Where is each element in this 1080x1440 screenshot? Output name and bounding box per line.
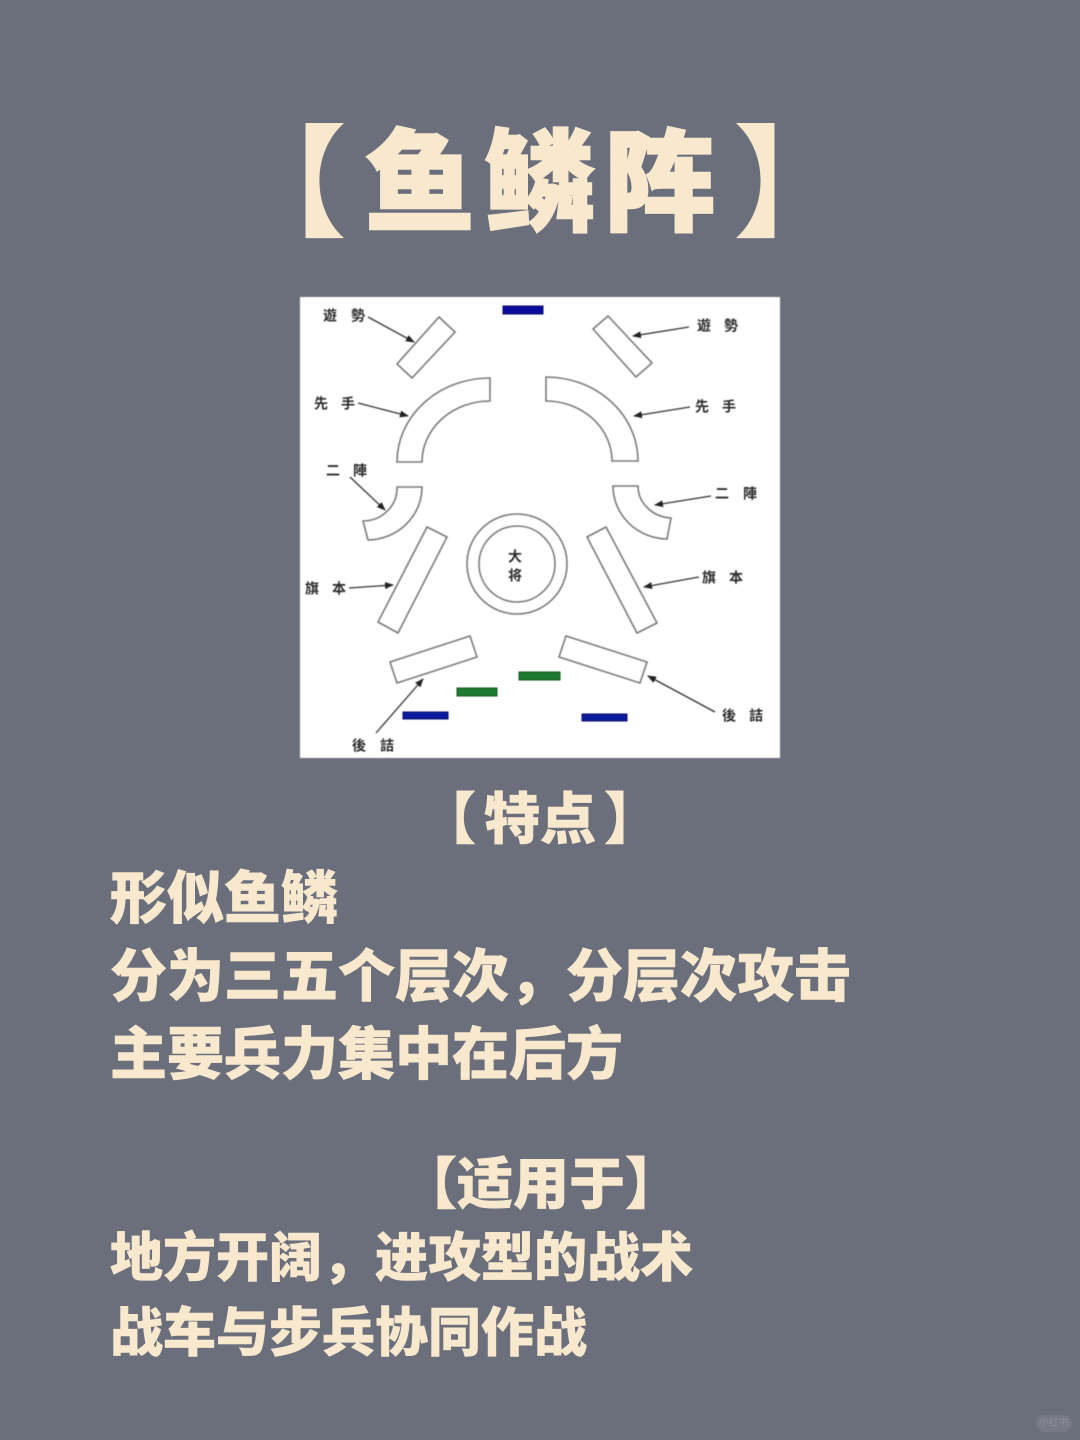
title: 阵 xyxy=(605,123,715,246)
watermark: 小红书 xyxy=(1039,1418,1069,1429)
diagram labels: 陣 xyxy=(353,464,367,480)
diagram labels: 旗 xyxy=(305,580,319,598)
diagram labels: 二 xyxy=(715,488,729,502)
diagram labels: 勢 xyxy=(351,308,365,324)
diagram labels xyxy=(305,308,763,754)
diagram labels: 本 xyxy=(332,580,346,598)
title: 鳞 xyxy=(485,123,595,246)
formation units xyxy=(363,316,671,683)
diagram labels: 先 xyxy=(695,398,709,416)
diagram: fish scale formation xyxy=(299,296,781,759)
diagram labels: 手 xyxy=(341,396,355,412)
features text xyxy=(110,867,851,1087)
title: 鱼 xyxy=(365,123,475,246)
heading: applicable to: 【适用于】 xyxy=(401,1153,681,1216)
diagram labels: 本 xyxy=(729,570,743,586)
applicable text: 战车与步兵协同作战 xyxy=(110,1304,587,1363)
diagram labels: 詰 xyxy=(380,738,394,754)
title: 】 xyxy=(733,117,855,253)
title xyxy=(225,117,855,253)
features text: 分为三五个层次，分层次攻击 xyxy=(110,945,851,1009)
title: 【 xyxy=(225,117,347,253)
diagram labels: 後 xyxy=(722,708,736,724)
diagram labels: 遊 xyxy=(323,308,337,324)
diagram labels: 旗 xyxy=(702,570,716,586)
diagram labels: 大 xyxy=(508,548,522,566)
heading: features: 【特点】 xyxy=(420,788,660,851)
diagram labels: 勢 xyxy=(724,318,738,334)
features text: 主要兵力集中在后方 xyxy=(110,1023,623,1087)
applicable text: 地方开阔，进攻型的战术 xyxy=(110,1229,693,1288)
diagram labels: 詰 xyxy=(749,708,763,724)
diagram labels: 手 xyxy=(722,398,736,416)
diagram labels: 遊 xyxy=(697,318,711,334)
signal bars xyxy=(403,306,627,721)
diagram labels: 後 xyxy=(352,738,366,754)
watermark xyxy=(1036,1415,1072,1432)
applicable text xyxy=(110,1229,693,1363)
features text: 形似鱼鳞 xyxy=(110,867,338,931)
arrows xyxy=(349,317,715,733)
diagram labels: 将 xyxy=(508,568,522,584)
diagram labels: 先 xyxy=(314,396,328,412)
diagram labels: 二 xyxy=(326,464,340,480)
diagram labels: 陣 xyxy=(743,486,757,502)
